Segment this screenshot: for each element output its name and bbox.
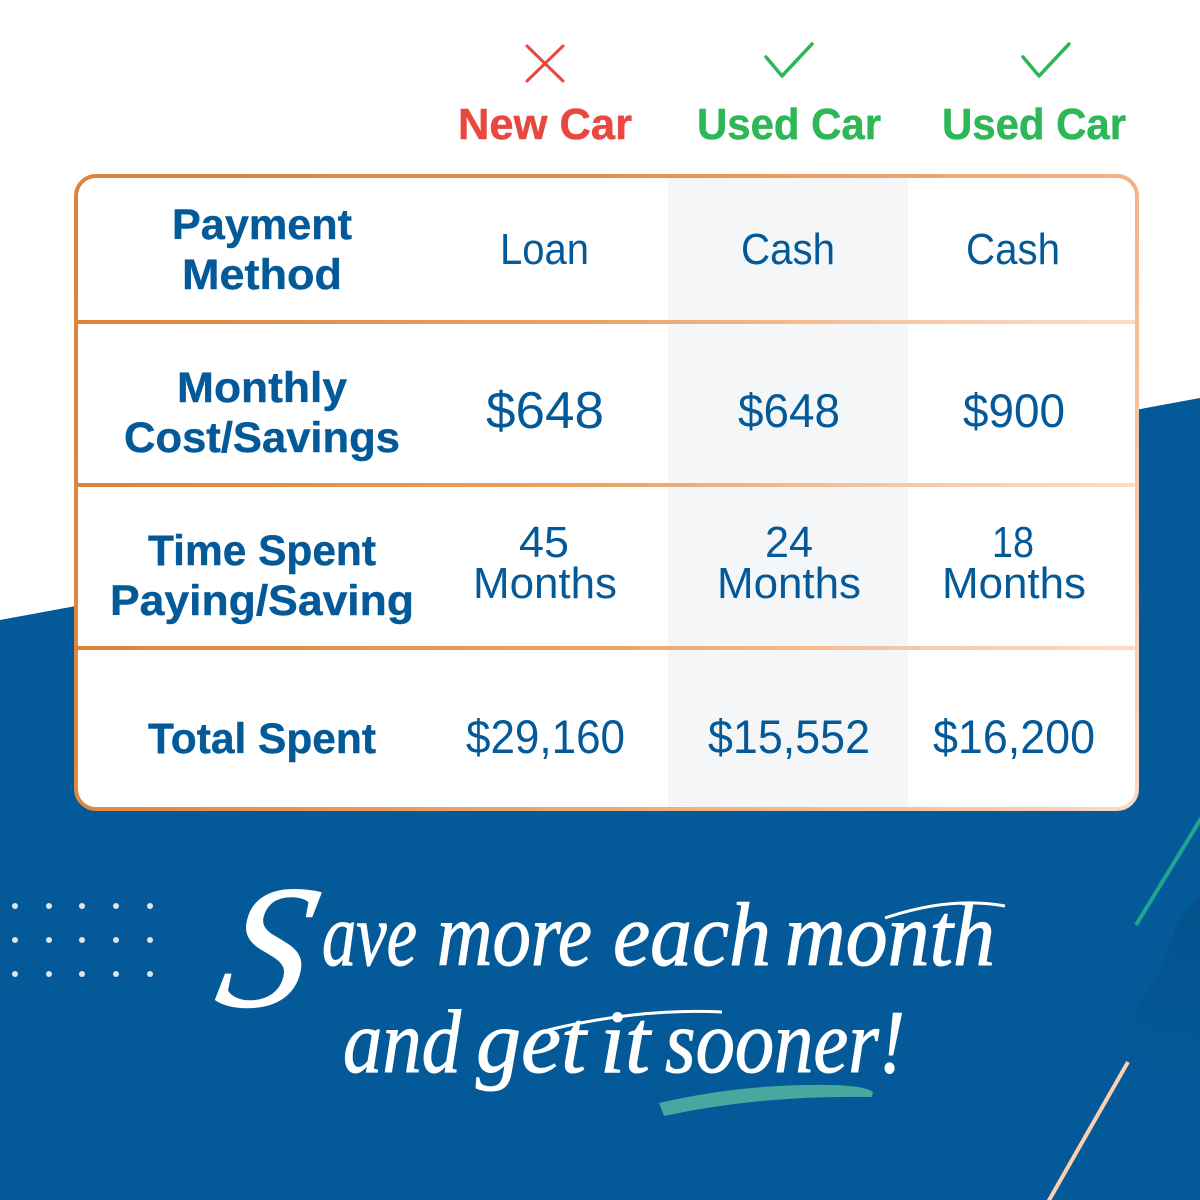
column headers (458, 44, 1126, 149)
tagline line 2 crossbar stroke (548, 1011, 722, 1030)
label: time spent paying/saving (110, 527, 414, 625)
row: monthly cost (124, 364, 1065, 462)
panel: comparison table (76, 176, 1137, 809)
label: monthly cost/savings (124, 364, 400, 462)
tagline line 1: each (613, 886, 771, 985)
tagline line 2 (343, 993, 905, 1092)
label: monthly cost/savings: Cost/Savings (124, 414, 400, 462)
tagline line 2: and (343, 993, 462, 1092)
tagline (204, 850, 1005, 1116)
label: total spent: Total Spent (148, 715, 376, 763)
value: 18 months: Months (942, 559, 1086, 608)
dot grid (12, 903, 153, 977)
value: 45 months (473, 518, 617, 608)
background: blue diagonal panel (0, 398, 1200, 1200)
row dividers (76, 320, 1137, 650)
value: cash 2: Cash (966, 225, 1060, 274)
value: cash 1: Cash (741, 225, 835, 274)
value: 45 months: 45 (519, 518, 569, 567)
value: loan: Loan (500, 225, 589, 274)
value: $16,200: $16,200 (933, 710, 1095, 763)
value: $15,552: $15,552 (708, 710, 870, 763)
label: payment method (172, 201, 352, 299)
label: payment method: Method (182, 251, 342, 299)
tagline line 1 crossbar stroke (885, 903, 1005, 918)
value: 24 months (717, 518, 861, 608)
header: used car 1: Used Car (697, 100, 881, 149)
header: used car 2: Used Car (942, 100, 1126, 149)
label: payment method: Payment (172, 201, 352, 249)
value: 24 months: Months (717, 559, 861, 608)
tagline line 1 (204, 850, 995, 1045)
icon: red cross (527, 46, 563, 81)
value: 18 months: 18 (992, 518, 1034, 567)
header: new car: New Car (458, 100, 632, 149)
value: $648 used car: $648 (738, 384, 840, 437)
table background (76, 176, 1137, 809)
value: 24 months: 24 (765, 518, 813, 567)
background: dark brush texture (1105, 895, 1200, 1120)
table frame (76, 176, 1137, 809)
label: time spent paying/saving: Time Spent (148, 527, 376, 575)
tagline line 2: sooner! (665, 993, 905, 1092)
icon: green check 2 (1023, 44, 1069, 76)
icon: green check 1 (766, 44, 812, 76)
row: time spent (110, 518, 1086, 625)
label: time spent paying/saving: Paying/Saving (110, 577, 414, 625)
value: 45 months: Months (473, 559, 617, 608)
teal brush underline (659, 1085, 873, 1116)
row: payment method (172, 201, 1060, 299)
accent line: peach (1048, 1062, 1128, 1200)
value: $900: $900 (963, 384, 1065, 437)
tagline line 1: ave (322, 886, 417, 985)
tagline line 1: S (204, 850, 333, 1045)
label: monthly cost/savings: Monthly (177, 364, 347, 412)
accent line: green (1136, 817, 1200, 925)
tagline line 1: more (437, 886, 592, 985)
tagline line 1: month (785, 886, 995, 985)
value: 18 months (942, 518, 1086, 608)
highlighted column (668, 178, 908, 807)
tagline line 2: it (600, 993, 652, 1092)
value: $29,160: $29,160 (466, 710, 625, 763)
tagline line 2: get (476, 993, 588, 1092)
row: total spent (148, 710, 1095, 763)
value: $648 new car: $648 (486, 382, 604, 440)
